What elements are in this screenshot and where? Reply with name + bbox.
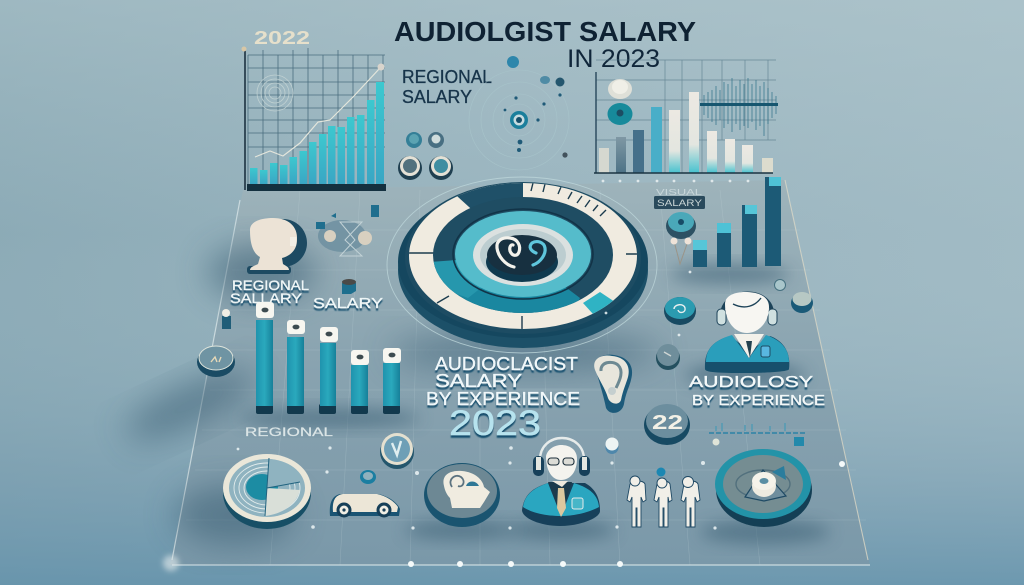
icon: audiologist with headphones <box>705 292 789 373</box>
salary by experience heading: 2023 <box>449 404 541 443</box>
scattered sparkle points <box>237 271 717 530</box>
salary tag: SALARY <box>657 198 702 208</box>
blurred data strip <box>709 423 806 446</box>
icon: doctor with glasses <box>522 438 600 526</box>
central concentric dial <box>386 176 658 354</box>
radar rings graphic <box>469 56 569 170</box>
icon: white ball <box>606 438 618 454</box>
icon: head with hearing coin <box>424 463 500 527</box>
teal bars with caps <box>256 302 401 414</box>
regional salary 3d labels <box>230 277 383 312</box>
icon: small ring <box>360 470 376 484</box>
centre hub <box>486 235 558 282</box>
icon: head silhouette <box>247 218 307 274</box>
regional salary label: SALARY <box>402 87 472 107</box>
rising dark bars <box>693 177 781 267</box>
regional salary 3d labels: SALARY <box>313 296 383 312</box>
salary by experience heading <box>426 354 580 443</box>
icon: small tooth coin <box>380 433 414 469</box>
icon: small dial coin <box>656 344 680 370</box>
regional salary 3d labels: SALLARY <box>230 290 303 306</box>
coin with number 22: 22 <box>652 412 683 434</box>
coin with number 22 <box>644 404 690 445</box>
waveform <box>704 78 776 136</box>
platform <box>163 180 870 571</box>
icon: fingerprint circle <box>257 75 293 111</box>
salary by experience heading: AUDIOCLACIST <box>435 354 578 374</box>
regional salary label: REGIONAL <box>402 67 492 87</box>
right bar chart with waveform <box>594 60 778 182</box>
salary tag: VISUAL <box>656 188 703 197</box>
icon: hearing ear tile <box>594 355 632 413</box>
teal ring <box>455 211 591 297</box>
salary by experience heading: SALARY <box>435 371 522 391</box>
regional label: REGIONAL <box>245 425 333 439</box>
outer cream ring <box>409 183 637 329</box>
audiology by experience label: BY EXPERIENCE <box>692 392 825 409</box>
dark middle ring <box>433 197 613 313</box>
icon: car <box>330 494 400 518</box>
audiology by experience label <box>689 374 825 409</box>
title <box>394 16 696 73</box>
regional salary 3d labels: REGIONAL <box>232 277 309 293</box>
left line and bar chart <box>242 28 386 191</box>
icon: teal coin <box>608 103 632 125</box>
small icon coins <box>398 132 453 180</box>
small pin icon <box>222 279 356 329</box>
icon: atom dial coin <box>715 449 812 527</box>
salary tag <box>654 188 705 209</box>
small connector icons <box>664 280 813 325</box>
icon: radar coin <box>223 454 311 529</box>
soft shadows <box>118 244 830 545</box>
light ring <box>473 224 573 286</box>
icon: white coin <box>608 79 632 99</box>
icon: coin left <box>197 346 235 377</box>
salary by experience heading: BY EXPERIENCE <box>426 389 580 409</box>
title: IN 2023 <box>567 45 660 73</box>
title: AUDIOLGIST SALARY <box>394 16 696 47</box>
year label 2022: 2022 <box>254 28 310 48</box>
hourglass graphic <box>316 205 379 256</box>
icon: three people <box>627 468 700 527</box>
icon: teal coin with pins <box>666 212 696 264</box>
audiology by experience label: AUDIOLOSY <box>689 374 813 391</box>
regional salary label <box>402 67 492 107</box>
icon: ears <box>497 238 545 267</box>
